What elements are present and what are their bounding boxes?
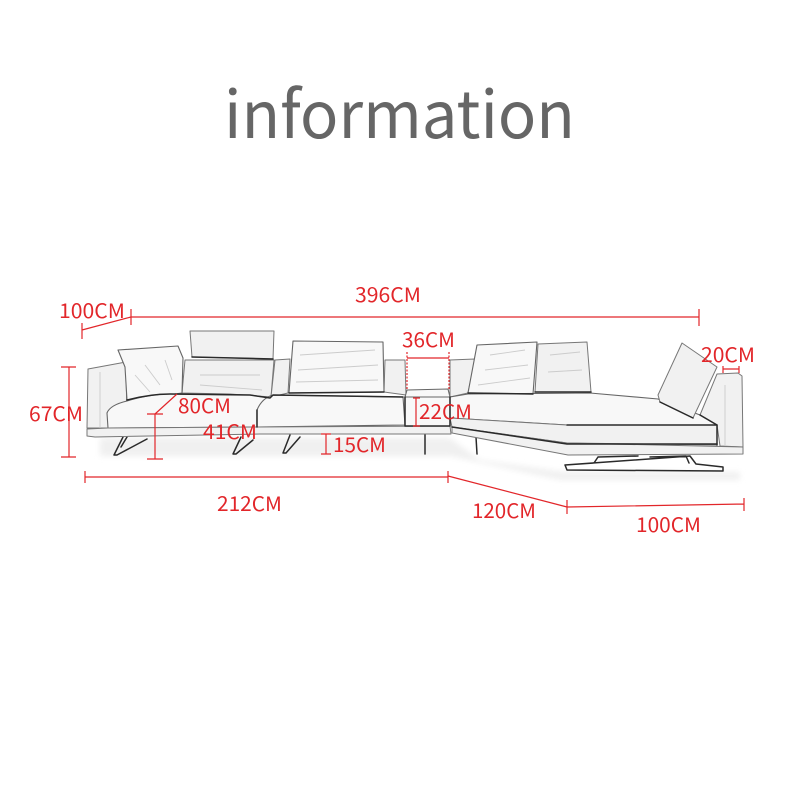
dark contour lines [127,357,717,445]
dimension: 41CM [147,414,257,459]
dimension: 22CM: 22CM [419,396,472,425]
middle seat [257,395,405,427]
dimension: 212CM [85,471,448,517]
chaise longue [450,393,743,455]
dimension: 396CM [131,279,699,326]
dimension: 20CM: 20CM [701,339,755,368]
dimension: 212CM: 212CM [217,488,282,517]
dimension: 100CM depth: 100CM [59,295,125,324]
sofa illustration [87,331,743,480]
left seat [107,394,270,428]
dimension: 36CM: 36CM [402,324,455,353]
middle back pieces [271,341,406,397]
dimension: 15CM: 15CM [333,429,386,458]
dimension: 120CM: 120CM [472,495,536,524]
right back cushions [450,342,591,397]
left base [87,426,451,437]
chaise leg [565,456,723,471]
dimension: 80CM: 80CM [178,390,231,419]
back cushions left [118,331,274,400]
dimension: 396CM: 396CM [355,279,421,308]
dimension: 36CM [402,324,455,390]
dimension: 100CM depth [59,295,131,339]
dimension: 100CM width [567,498,744,538]
dimension: 80CM [155,390,231,419]
dimension: 100CM width: 100CM [636,509,701,538]
dimension: 120CM [448,476,567,524]
dimension: 41CM: 41CM [203,416,257,445]
right pillow [658,343,717,418]
left sofa legs [114,434,477,455]
right arm [700,373,743,447]
left arm [87,362,127,428]
dimension: 67CM: 67CM [29,398,83,427]
side table [405,389,450,426]
dimension: 67CM [29,367,83,457]
floor shadow [100,438,740,480]
title: information [224,63,575,157]
